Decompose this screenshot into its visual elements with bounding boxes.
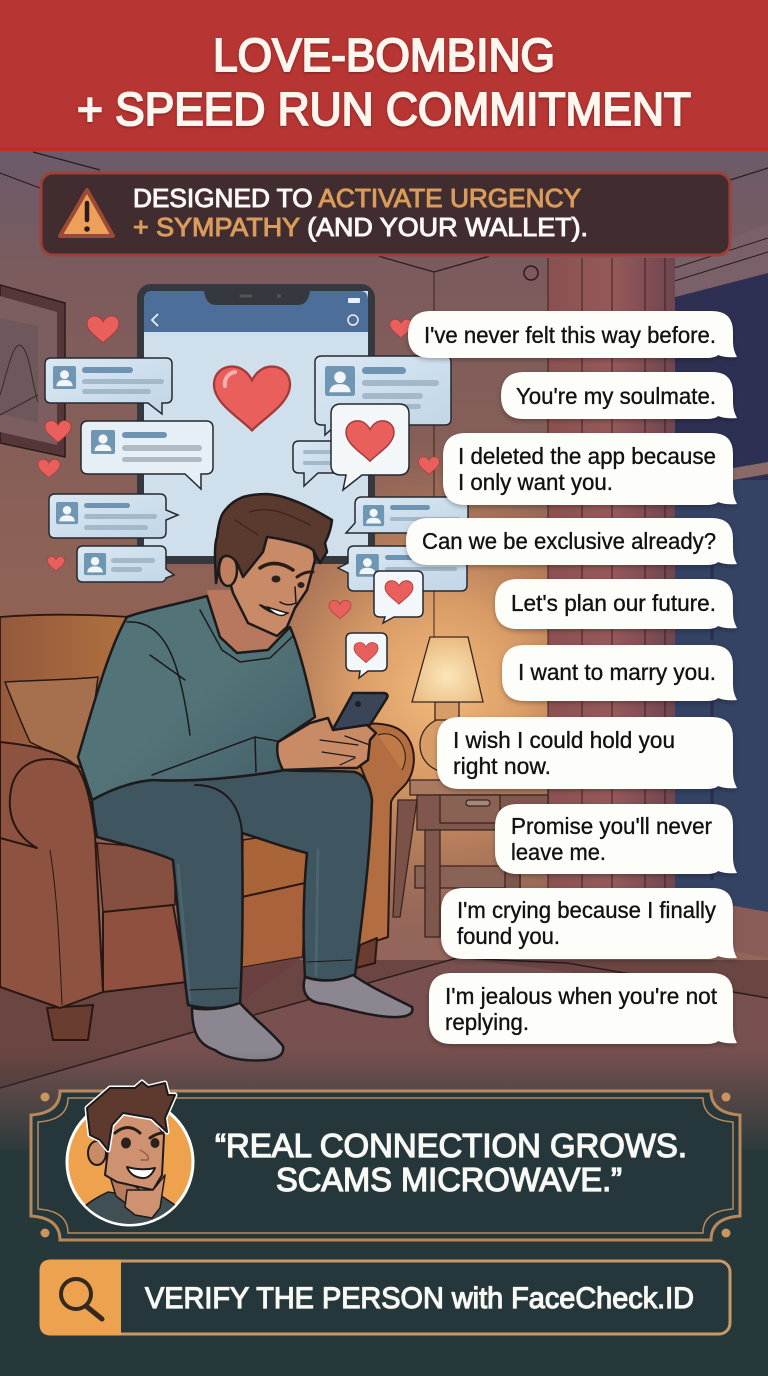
message text: leave me.: [511, 839, 606, 865]
message text: Promise you'll never: [511, 813, 712, 839]
message text: right now.: [453, 753, 551, 779]
warning text: DESIGNED TO ACTIVATE URGENCY: [133, 183, 581, 213]
ceiling lines: [0, 152, 768, 272]
warning text: [133, 183, 588, 242]
bubble 5: [315, 356, 451, 435]
avatar hand: [125, 1175, 165, 1218]
small floating hearts: [38, 316, 440, 619]
big heart: [214, 367, 290, 430]
seat and base: [97, 843, 175, 912]
quote text: “REAL CONNECTION GROWS.: [215, 1127, 687, 1164]
bubble 9: [338, 546, 467, 591]
message text: You're my soulmate.: [516, 383, 716, 409]
trousers: [92, 770, 372, 1008]
sweater: [78, 596, 315, 800]
phone screen: [144, 291, 368, 556]
picture frame: [0, 285, 65, 457]
room background: [0, 150, 768, 1150]
neck: [207, 590, 287, 652]
right arm: [350, 724, 414, 947]
cushion: [5, 677, 98, 770]
quote text: [215, 1127, 687, 1198]
sofa: [0, 615, 414, 1040]
message text: [422, 322, 718, 1035]
bubble 7 heart: [331, 404, 409, 490]
window: [675, 273, 768, 480]
phone in hand: [332, 693, 388, 731]
warning text: + SYMPATHY (AND YOUR WALLET).: [133, 212, 588, 242]
face: [228, 530, 315, 636]
nose: [280, 587, 296, 605]
bubble 6 small: [293, 441, 340, 486]
bubble 2: [81, 421, 213, 489]
smile: [260, 605, 288, 614]
message text: I only want you.: [458, 469, 613, 495]
left arm: [0, 742, 103, 1008]
curtain: [548, 258, 675, 908]
quote text: SCAMS MICROWAVE.”: [276, 1161, 622, 1198]
bubble 11 heart: [346, 633, 387, 678]
title: + SPEED RUN COMMITMENT: [77, 83, 691, 135]
message text: Can we be exclusive already?: [422, 528, 716, 554]
sofa back: [0, 615, 130, 780]
avatar: [67, 1082, 193, 1235]
avatar head: [105, 1111, 164, 1190]
warning panel: [41, 173, 730, 255]
socks: [192, 975, 412, 1061]
message text: I'm jealous when you're not: [445, 983, 718, 1009]
icon: magnifier: [40, 1260, 121, 1336]
sofa leg: [47, 1005, 93, 1040]
side table: [393, 780, 548, 937]
bottom fade: [0, 1050, 768, 1160]
message text: found you.: [457, 923, 560, 949]
message text: I wish I could hold you: [453, 727, 675, 753]
floor: [0, 960, 768, 1150]
bubble 1: [45, 358, 172, 414]
message text: I deleted the app because: [458, 443, 716, 469]
cta text: VERIFY THE PERSON with FaceCheck.ID: [145, 1282, 694, 1315]
bubble 3: [49, 494, 178, 538]
lamp shade: [412, 637, 483, 702]
bubble 4: [77, 546, 174, 582]
title: [77, 29, 691, 135]
message text: I've never felt this way before.: [424, 322, 716, 348]
icon: warning triangle: [60, 190, 113, 236]
app chat bubbles: [45, 356, 468, 678]
message bubbles: [406, 311, 737, 1044]
head: [215, 494, 332, 636]
eyes and brows: [260, 563, 293, 570]
ear: [219, 554, 237, 586]
phone backdrop: [137, 284, 375, 564]
title banner: [0, 0, 768, 151]
title: LOVE-BOMBING: [213, 29, 555, 81]
message text: I'm crying because I finally: [457, 897, 716, 923]
bubble 10 heart: [374, 571, 423, 623]
man: [78, 494, 412, 1061]
call to action: [40, 1260, 730, 1336]
message text: replying.: [445, 1009, 529, 1035]
bubble 8: [346, 497, 468, 533]
hair: [215, 494, 332, 583]
lamp and side table: [393, 637, 548, 937]
message text: I want to marry you.: [518, 659, 716, 685]
quote panel: [31, 1082, 740, 1240]
message text: Let's plan our future.: [511, 590, 716, 616]
hands: [277, 718, 376, 770]
